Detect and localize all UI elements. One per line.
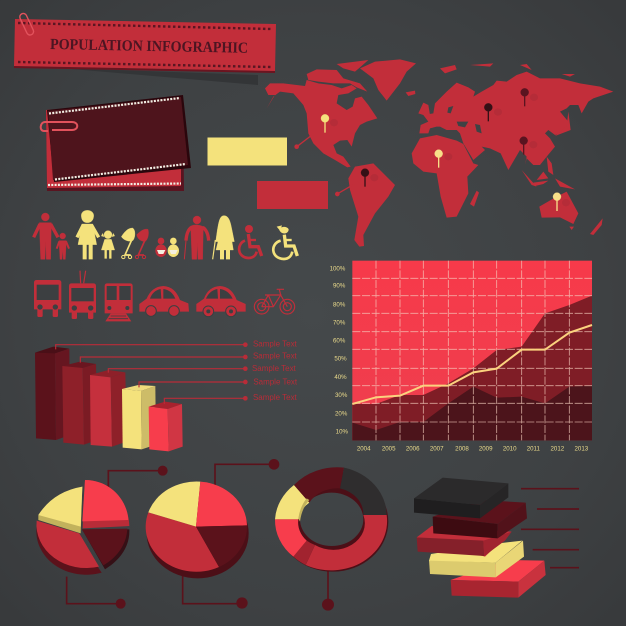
map pin: Central Asia: [484, 103, 492, 121]
x axis labels: [357, 446, 589, 453]
icon: bus: [34, 280, 61, 317]
layer leader lines: [521, 489, 579, 568]
icon: mother and daughter: [77, 210, 115, 259]
3D bar chart: [35, 339, 298, 451]
icon: yellow wheelchair: [273, 225, 297, 259]
area and line chart: [330, 261, 592, 453]
bar 3: [90, 370, 127, 447]
icon: father and child: [34, 213, 69, 259]
title banner: [14, 12, 276, 85]
map pin: South America: [361, 169, 369, 187]
yellow label box: [208, 138, 287, 166]
icon: bicycle: [254, 289, 295, 314]
stacked layers chart: [414, 478, 579, 598]
icon: trolleybus: [69, 271, 96, 319]
sample text labels: Sample Text: [253, 377, 298, 386]
y axis labels: 70%: [333, 320, 346, 327]
y axis labels: 100%: [330, 265, 346, 272]
map pin: China: [520, 137, 528, 155]
Madagascar: [470, 191, 479, 207]
bar 4: [122, 385, 156, 449]
x axis labels: 2007: [430, 446, 444, 453]
icon: red baby: [155, 238, 167, 257]
Arctic islands: [307, 60, 368, 92]
y axis labels: 10%: [336, 429, 349, 436]
note card with paper clip: [41, 95, 191, 191]
y axis labels: 90%: [333, 283, 346, 290]
sample text labels: [252, 339, 298, 402]
icon: red wheelchair: [239, 225, 262, 258]
South America: [348, 163, 395, 247]
icon: car one: [139, 286, 189, 316]
icon: card paper clip: [41, 122, 77, 131]
large pie: [146, 459, 279, 609]
map pin: Australia: [553, 193, 561, 211]
map pin shadows: [330, 94, 570, 206]
icon: train: [105, 283, 133, 321]
icon: banner paper clip: [19, 12, 35, 36]
sample text labels: Sample Text: [252, 364, 297, 373]
Eurasia: [419, 72, 613, 170]
icon: elderly man with cane: [184, 216, 209, 259]
sample text labels: Sample Text: [253, 339, 298, 348]
world map: [265, 59, 613, 247]
layer: dark maroon: [433, 500, 527, 538]
layer: mid red: [417, 526, 512, 557]
icon: yellow baby: [168, 238, 179, 257]
x axis labels: 2013: [574, 446, 589, 453]
x axis labels: 2004: [357, 446, 371, 453]
donut chart: [275, 467, 388, 611]
chart plot: [352, 261, 592, 440]
icon: car two: [196, 286, 246, 317]
x axis labels: 2008: [455, 446, 469, 453]
y axis labels: 80%: [333, 301, 346, 308]
x axis labels: 2009: [479, 446, 493, 453]
North America: [265, 80, 377, 167]
layer: black top: [414, 478, 508, 518]
Greenland: [360, 59, 416, 101]
exploded pie: [36, 466, 168, 609]
icon: elderly woman with cane: [213, 216, 234, 259]
UK, Japan, SE Asia and Oceania islands: [418, 63, 603, 235]
dark area: [352, 386, 592, 440]
callout lines with sample text: [56, 345, 245, 404]
layer: yellow: [429, 541, 524, 577]
y axis labels: 20%: [335, 411, 348, 418]
Iceland: [406, 91, 415, 96]
title: POPULATION INFOGRAPHIC: [50, 36, 248, 57]
sample text labels: Sample Text: [253, 393, 298, 402]
x axis labels: 2006: [406, 446, 420, 453]
map pin: Africa: [435, 150, 443, 168]
bar 1: [35, 347, 70, 440]
bar 2: [62, 362, 97, 445]
layer: red bottom: [451, 560, 546, 598]
red label box: [257, 181, 328, 209]
icon: red stroller: [135, 229, 149, 259]
y axis labels: 40%: [334, 374, 347, 381]
x axis labels: 2010: [503, 446, 517, 453]
bar 5: [149, 402, 183, 451]
x axis labels: 2005: [382, 446, 396, 453]
y axis labels: 50%: [334, 356, 347, 363]
people icons: [34, 210, 297, 321]
y axis labels: 30%: [335, 392, 348, 399]
map leader lines: [295, 136, 360, 196]
inland seas: [447, 106, 482, 133]
map pin: Siberia: [521, 88, 529, 106]
map pin: USA: [321, 114, 329, 133]
middle area: [352, 296, 592, 440]
y axis labels: 60%: [333, 338, 346, 345]
icon: yellow stroller: [121, 228, 135, 259]
yellow trend line: [352, 325, 592, 404]
y axis labels: [330, 265, 349, 436]
Africa: [412, 135, 478, 218]
sample text labels: Sample Text: [253, 352, 298, 361]
pie charts: [36, 459, 279, 609]
x axis labels: 2012: [550, 446, 565, 453]
x axis labels: 2011: [527, 446, 541, 453]
Australia: [539, 192, 578, 230]
